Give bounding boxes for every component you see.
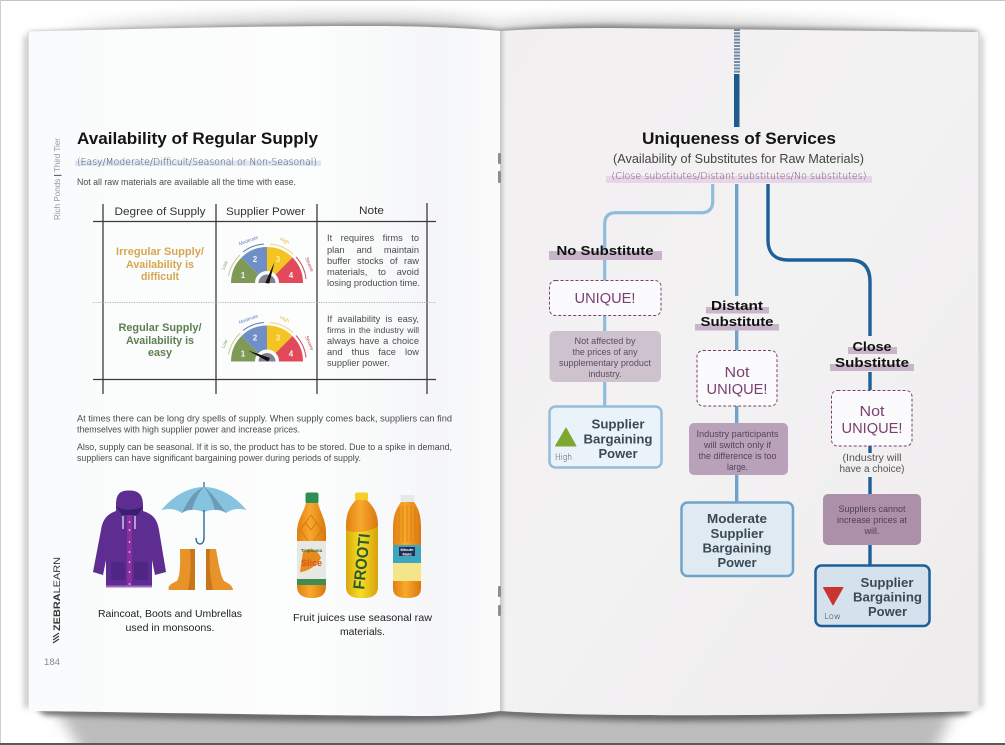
result: high supplier bargaining power: Supplier — [592, 416, 645, 432]
explanation: large. — [727, 462, 748, 472]
branch: distant substitute — [682, 184, 793, 576]
unique tag — [550, 280, 661, 316]
brand logo: ZEBRALEARN — [52, 557, 63, 631]
heading: uniqueness of services: Uniqueness of Services — [642, 129, 836, 148]
illustration: frooti bottle: FROOTI — [351, 533, 374, 590]
note: first row: buffer stocks of raw — [327, 256, 419, 266]
result: low supplier bargaining power: Bargaining — [853, 590, 922, 604]
gauge: low — [221, 313, 315, 362]
explanation: will switch only if — [703, 440, 771, 450]
body paragraphs: At times there can be long dry spells of supply. When supply comes back, suppliers can find — [77, 414, 452, 424]
label: close substitute: Substitute — [835, 355, 909, 370]
row label: irregular: difficult — [141, 271, 179, 283]
label: no substitute — [549, 243, 662, 260]
result: high supplier bargaining power — [550, 406, 662, 468]
row label: irregular — [116, 246, 204, 283]
not unique tag: UNIQUE! — [706, 382, 768, 398]
illustration: minute maid bottle: Minute — [401, 547, 414, 552]
caption: raincoat: used in monsoons. — [126, 622, 214, 634]
right page — [498, 28, 978, 715]
table header: note: Note — [359, 205, 384, 217]
table: degree of supply — [93, 203, 436, 394]
caption: fruit juices: materials. — [340, 626, 385, 638]
intro text: Not all raw materials are available all the time with ease. — [77, 177, 296, 187]
label: close substitute — [830, 339, 914, 371]
label: distant substitute: Distant — [711, 298, 764, 313]
row label: irregular: Irregular Supply/ — [116, 246, 204, 258]
illustration: minute maid bottle: Maid — [402, 552, 412, 556]
result: low supplier bargaining power: Power — [868, 604, 907, 619]
illustration: boots — [169, 549, 233, 590]
note: second row: If availability is easy, — [327, 314, 419, 324]
explanation: increase prices at — [837, 515, 907, 525]
explanation — [550, 331, 661, 382]
note: first row: It requires firms to — [327, 233, 419, 243]
subheading: (Availability of Substitutes for Raw Materials) — [613, 152, 864, 166]
result: moderate supplier bargaining power: Supplier — [710, 526, 764, 541]
top connector — [734, 29, 740, 127]
illustration: minute maid bottle — [393, 495, 421, 598]
illustration: tropicana bottle — [297, 492, 326, 598]
table header: supplier power: Supplier Power — [226, 206, 305, 218]
page number: 184 — [44, 657, 60, 667]
label: distant substitute — [695, 298, 779, 330]
note: first row — [327, 233, 421, 291]
explanation — [823, 494, 921, 545]
explanation: will. — [864, 526, 880, 536]
caption: raincoat: Raincoat, Boots and Umbrellas — [98, 608, 242, 620]
side running header: Rich Ponds | Third Tier — [53, 138, 62, 220]
icon: green up triangle — [556, 428, 576, 446]
not unique tag — [697, 350, 777, 406]
explanation: Industry participants — [696, 429, 779, 439]
row label: regular: Regular Supply/ — [118, 322, 202, 334]
illustration: raincoat — [93, 490, 166, 588]
not unique tag — [832, 390, 912, 446]
result: moderate supplier bargaining power: Moderate — [707, 511, 767, 526]
note: first row: losing production time. — [327, 278, 420, 288]
industry choice note: (Industry will — [842, 453, 902, 464]
body paragraphs — [77, 414, 452, 463]
result: low supplier bargaining power — [816, 566, 930, 626]
result: low supplier bargaining power: Low — [824, 612, 841, 621]
explanation — [689, 423, 788, 475]
explanation: Suppliers cannot — [838, 504, 906, 514]
label: close substitute: Close — [852, 339, 892, 354]
result: moderate supplier bargaining power: Bargaining — [702, 540, 772, 556]
row label: regular: easy — [148, 347, 173, 359]
note: second row: and thus face low — [327, 347, 419, 357]
result: high supplier bargaining power: Power — [598, 446, 638, 461]
result: moderate supplier bargaining power: Power — [718, 555, 757, 570]
not unique tag: Not — [860, 404, 884, 420]
note: first row: materials, to avoid — [327, 267, 419, 277]
explanation: supplementary product — [559, 358, 651, 368]
spine — [498, 31, 506, 711]
options highlight: (Close substitutes/Distant substitutes/No substitutes) — [612, 171, 866, 182]
note: first row: plan and maintain — [327, 245, 419, 255]
industry choice note — [840, 453, 904, 475]
branch: no substitute — [549, 184, 713, 468]
unique tag: UNIQUE! — [574, 291, 636, 307]
note: second row: supplier power. — [327, 358, 390, 368]
not unique tag: Not — [724, 365, 750, 381]
note: second row: always have a choice — [327, 336, 419, 346]
caption: fruit juices: Fruit juices use seasonal raw — [293, 612, 432, 624]
gauge: high — [221, 235, 315, 284]
body paragraphs: Also, supply can be seasonal. If it is so, the product has to be stored. Due to a spike in demand, — [77, 442, 452, 452]
not unique tag: UNIQUE! — [842, 421, 902, 437]
explanation: the prices of any — [572, 347, 638, 357]
body paragraphs: themselves with high supplier power and increase prices. — [77, 424, 300, 434]
row label: regular — [118, 322, 202, 359]
illustration: tropicana bottle: Tropicana — [301, 548, 323, 553]
caption: raincoat — [98, 608, 242, 634]
icon: red down triangle — [824, 588, 843, 605]
explanation: Not affected by — [574, 336, 636, 346]
explanation: industry. — [588, 369, 622, 379]
row label: regular: Availability is — [126, 335, 194, 347]
branch: close substitute — [768, 184, 930, 626]
table header: degree of supply: Degree of Supply — [114, 206, 206, 218]
illustration: frooti bottle — [346, 492, 378, 598]
result: moderate supplier bargaining power — [682, 502, 793, 576]
body paragraphs: suppliers can have significant bargaining power during periods of supply. — [77, 453, 361, 463]
left page — [29, 26, 500, 716]
caption: fruit juices — [293, 612, 432, 638]
page heading: Availability of Regular Supply — [77, 129, 319, 148]
industry choice note: have a choice) — [840, 464, 904, 475]
explanation: the difference is too — [698, 451, 776, 461]
note: second row — [327, 314, 421, 372]
heading subtitle highlight: (Easy/Moderate/Difficult/Seasonal or Non-Seasonal) — [77, 157, 317, 168]
label: no substitute: No Substitute — [556, 243, 654, 258]
note: second row: firms in the industry will — [327, 325, 419, 335]
row label: irregular: Availability is — [126, 259, 194, 271]
result: low supplier bargaining power: Supplier — [860, 575, 914, 590]
illustration: umbrella — [162, 482, 246, 544]
result: high supplier bargaining power: High — [555, 453, 572, 463]
label: distant substitute: Substitute — [700, 314, 774, 329]
illustration: tropicana bottle: Slice — [301, 558, 322, 568]
result: high supplier bargaining power: Bargaining — [584, 432, 652, 446]
